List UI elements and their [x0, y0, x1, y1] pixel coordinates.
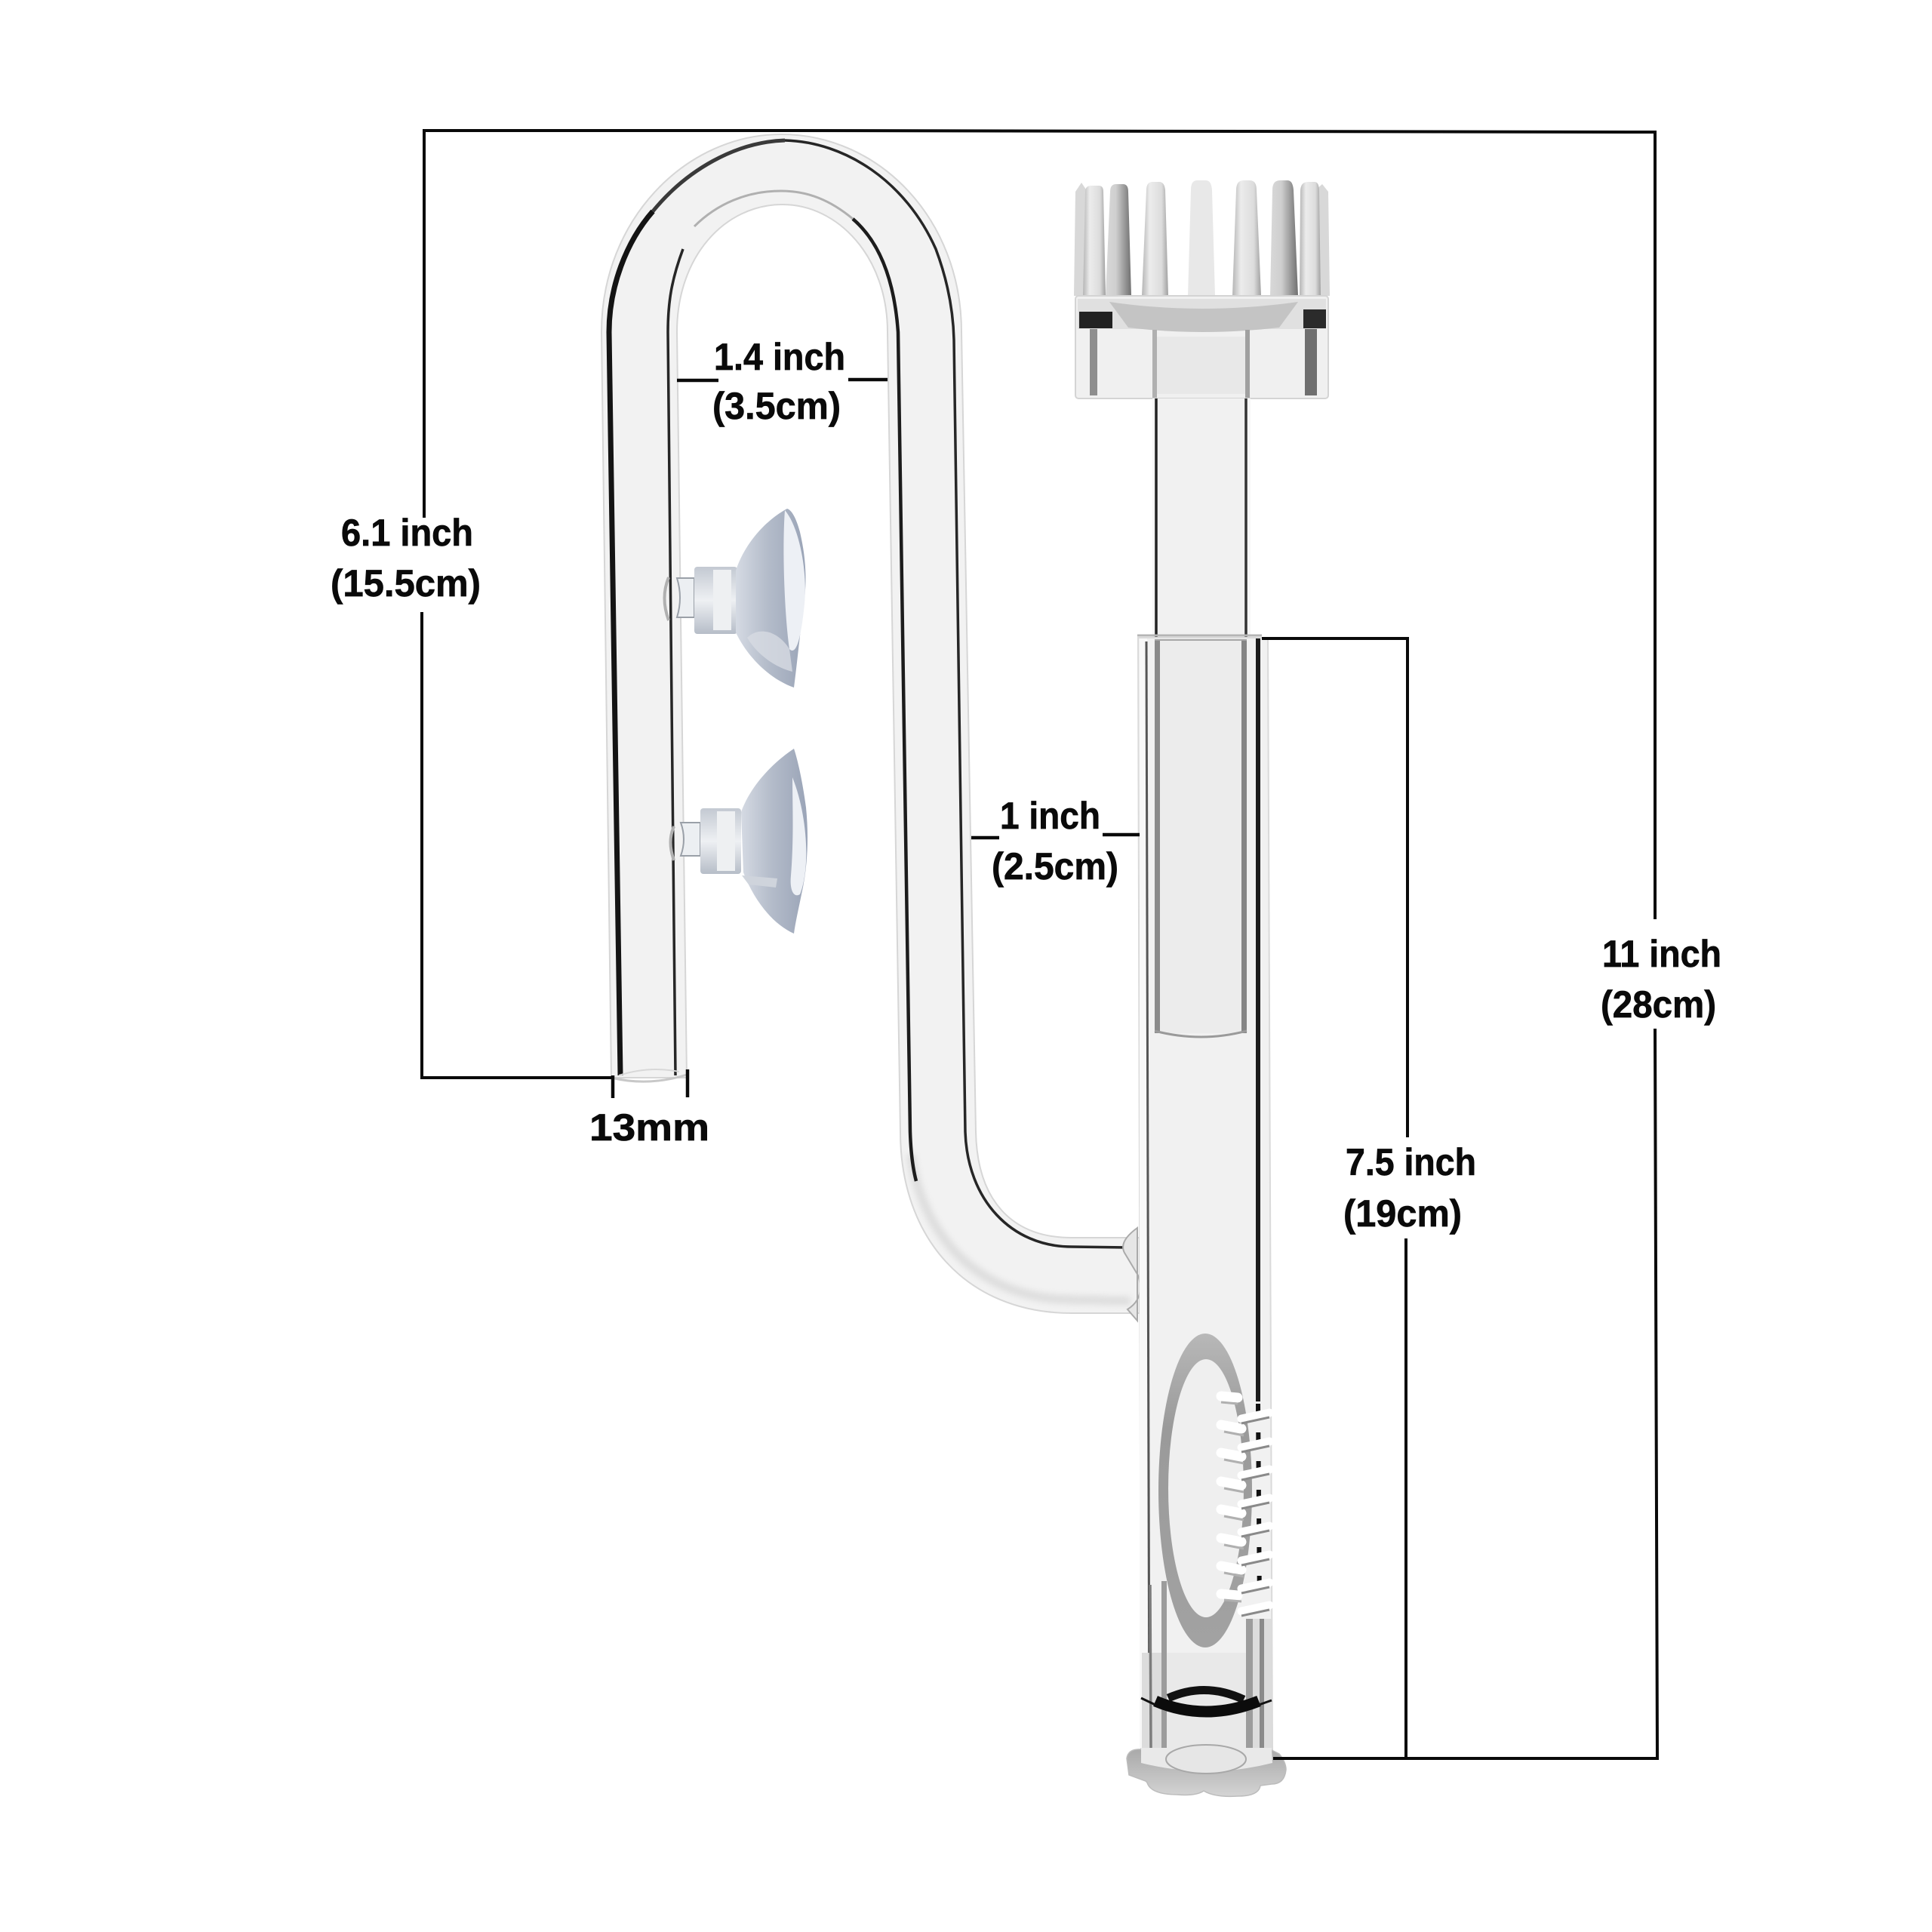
dimension: 7.5 inch tube length: 7.5 inch: [1346, 1141, 1476, 1183]
dimension: 6.1 inch overall height of U: [331, 131, 613, 1079]
main tube body: [1137, 398, 1272, 1751]
dimension: 1 inch gap: (2.5cm): [992, 845, 1118, 888]
dimension: 1 inch gap: 1 inch: [1000, 795, 1100, 837]
dimension: 7.5 inch tube length: (19cm): [1343, 1192, 1462, 1235]
spiral bristles: [1221, 1396, 1269, 1616]
dimension: 1.4 inch gap: [677, 336, 888, 427]
dimension: 11 inch total height: 11 inch: [1602, 933, 1721, 975]
dimension: 6.1 inch overall height of U: 6.1 inch: [341, 512, 473, 554]
dimension: 11 inch total height: [423, 131, 1721, 1758]
strainer head with teeth: [1074, 180, 1330, 398]
flower-shaped base: [1127, 1745, 1286, 1796]
dimension: 11 inch total height: (28cm): [1601, 983, 1716, 1026]
dimension: 7.5 inch tube length: [1262, 638, 1476, 1758]
icon: upper suction cup: [664, 509, 805, 688]
icon: lower suction cup: [670, 749, 808, 934]
oval side slot: [1158, 1334, 1252, 1647]
glass U-tube with S bend: [601, 134, 1140, 1321]
black O-ring: [1141, 1690, 1272, 1712]
dimension: 1.4 inch gap: 1.4 inch: [714, 336, 845, 378]
dimension: 6.1 inch overall height of U: (15.5cm): [331, 562, 481, 605]
dimension: 13mm outlet: 13mm: [589, 1106, 709, 1149]
dimension: 1.4 inch gap: (3.5cm): [712, 385, 841, 427]
dimension: 1 inch gap: [971, 795, 1140, 888]
